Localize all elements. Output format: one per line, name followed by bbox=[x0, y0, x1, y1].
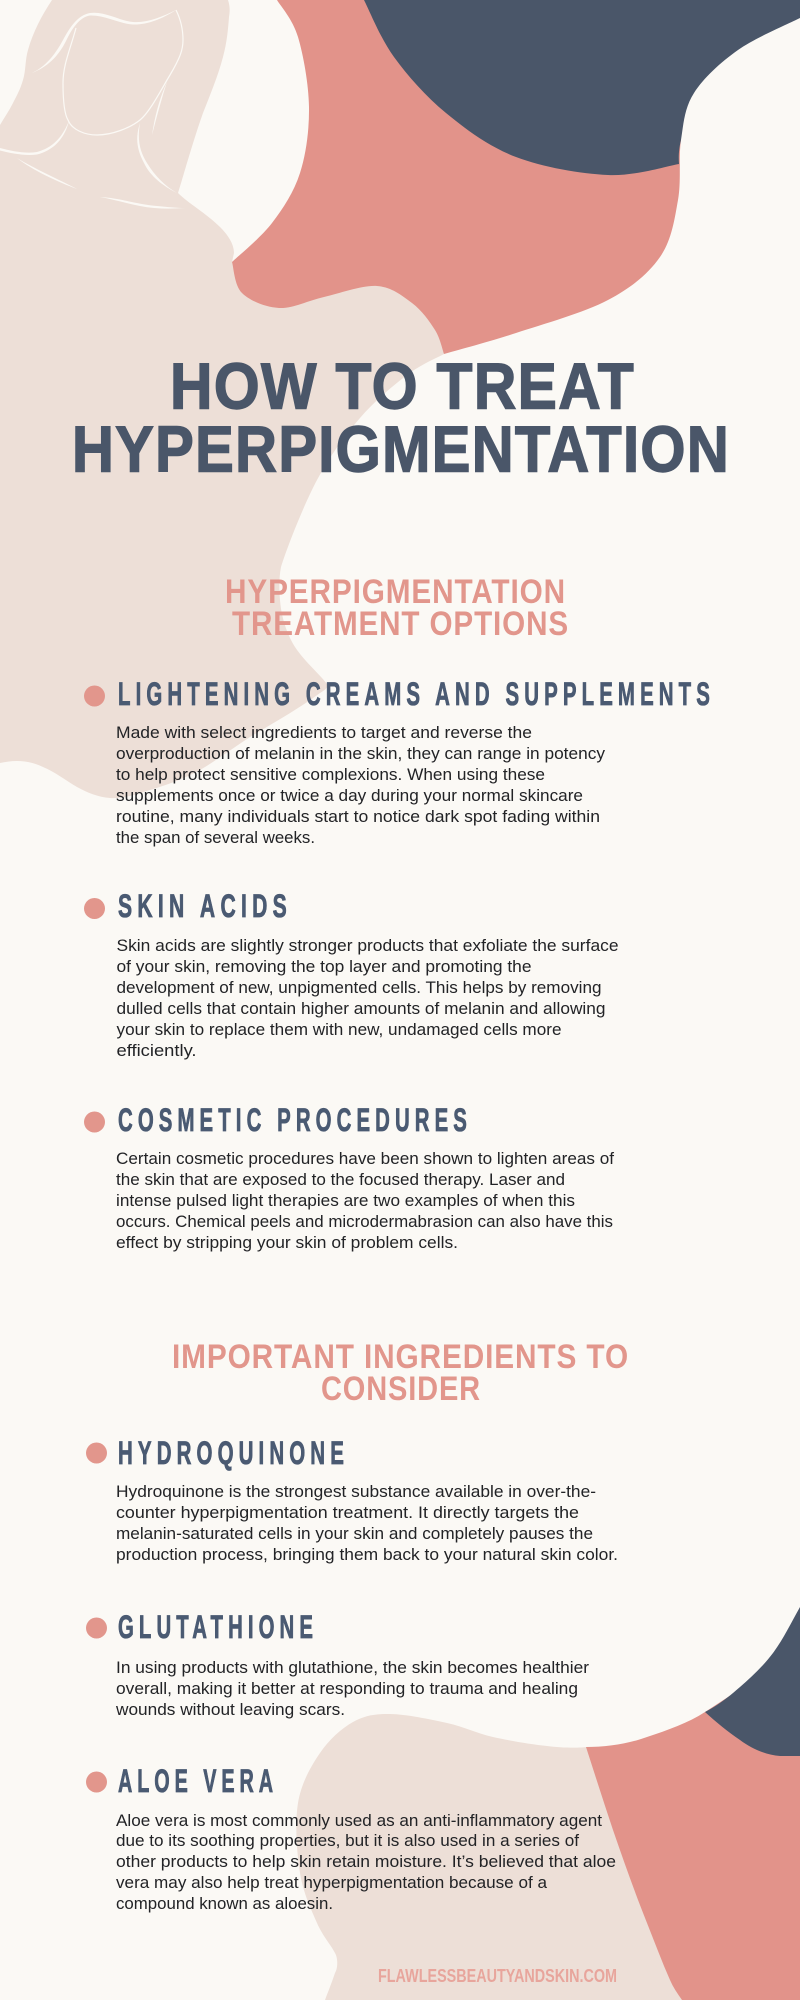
item body: Aloe vera is most commonly used as an anti-inflammatory agent bbox=[116, 1812, 602, 1830]
item body: effect by stripping your skin of problem cells. bbox=[116, 1234, 458, 1252]
dark blob top right bbox=[364, 0, 800, 175]
section heading: important ingredients bbox=[172, 1338, 629, 1408]
bullet bbox=[84, 1112, 105, 1132]
item body: Certain cosmetic procedures have been shown to lighten areas of bbox=[116, 1150, 614, 1168]
item: skin acids bbox=[84, 888, 618, 1060]
bullet bbox=[84, 686, 105, 706]
item body: compound known as aloesin. bbox=[116, 1895, 333, 1913]
neck left and shoulder bbox=[0, 121, 69, 155]
item body: routine, many individuals start to notice dark spot fading within bbox=[116, 808, 600, 826]
item heading: ALOE VERA bbox=[118, 1763, 278, 1799]
bullet bbox=[86, 1442, 107, 1464]
collar right bbox=[100, 197, 185, 209]
item body bbox=[116, 1812, 616, 1913]
beige blob bottom bbox=[296, 1714, 700, 2000]
item body: Skin acids are slightly stronger products that exfoliate the surface bbox=[116, 937, 618, 955]
collar left bbox=[17, 158, 77, 189]
section heading: treatment options: TREATMENT OPTIONS bbox=[232, 605, 569, 643]
item body bbox=[116, 724, 606, 847]
item body: vera may also help treat hyperpigmentation because of a bbox=[116, 1874, 548, 1892]
footer url: FLAWLESSBEAUTYANDSKIN.COM bbox=[378, 1966, 617, 1986]
section heading: important ingredients: IMPORTANT INGREDIENTS TO bbox=[172, 1338, 629, 1376]
bullet bbox=[86, 1772, 107, 1792]
bullet bbox=[84, 898, 105, 919]
item body: occurs. Chemical peels and microdermabrasion can also have this bbox=[116, 1213, 613, 1231]
item heading: HYDROQUINONE bbox=[118, 1435, 349, 1471]
section heading: important ingredients: CONSIDER bbox=[321, 1370, 481, 1408]
item body: production process, bringing them back to your natural skin color. bbox=[116, 1546, 618, 1564]
item body: efficiently. bbox=[116, 1042, 196, 1060]
pink blob top bbox=[232, 0, 681, 354]
item: aloe vera bbox=[86, 1763, 616, 1913]
neck right bbox=[137, 123, 177, 193]
item heading: COSMETIC PROCEDURES bbox=[118, 1102, 472, 1138]
item body: wounds without leaving scars. bbox=[115, 1701, 345, 1719]
top decorative blobs bbox=[0, 0, 800, 798]
side hair strand bbox=[152, 82, 167, 135]
item body: In using products with glutathione, the skin becomes healthier bbox=[116, 1659, 590, 1677]
item body: dulled cells that contain higher amounts of melanin and allowing bbox=[116, 1000, 606, 1018]
item body: intense pulsed light therapies are two examples of when this bbox=[116, 1192, 575, 1210]
item body: Made with select ingredients to target and reverse the bbox=[116, 724, 532, 742]
item: lightening creams bbox=[84, 676, 715, 847]
item body: melanin-saturated cells in your skin and completely pauses the bbox=[116, 1525, 593, 1543]
item body: overall, making it better at responding to trauma and healing bbox=[116, 1680, 578, 1698]
hair line bbox=[32, 10, 176, 73]
item: cosmetic procedures bbox=[84, 1102, 614, 1252]
item body: other products to help skin retain moisture. It’s believed that aloe bbox=[116, 1853, 616, 1871]
item body: of your skin, removing the top layer and promoting the bbox=[116, 958, 532, 976]
section heading: treatment options bbox=[225, 573, 569, 643]
item: hydroquinone bbox=[86, 1435, 618, 1564]
item body: supplements once or twice a day during your normal skincare bbox=[116, 787, 583, 805]
item body bbox=[116, 937, 618, 1060]
item body: your skin to replace them with new, undamaged cells more bbox=[116, 1021, 562, 1039]
item body: counter hyperpigmentation treatment. It directly targets the bbox=[116, 1504, 579, 1522]
dark blob bottom right bbox=[705, 1607, 800, 1756]
item body bbox=[116, 1150, 614, 1252]
item body: due to its soothing properties, but it is also used in a series of bbox=[116, 1832, 579, 1850]
main title bbox=[72, 350, 730, 486]
section heading: treatment options: HYPERPIGMENTATION bbox=[225, 573, 566, 611]
bottom decorative blobs bbox=[296, 1607, 800, 2000]
item: glutathione bbox=[86, 1609, 590, 1719]
item heading: GLUTATHIONE bbox=[118, 1609, 318, 1645]
item body bbox=[115, 1659, 590, 1719]
item body: to help protect sensitive complexions. When using these bbox=[116, 766, 545, 784]
beige blob top left bbox=[0, 0, 444, 798]
pink blob bottom right bbox=[586, 1650, 800, 2000]
item body: development of new, unpigmented cells. This helps by removing bbox=[116, 979, 602, 997]
item body: overproduction of melanin in the skin, they can range in potency bbox=[116, 745, 606, 763]
main title: HYPERPIGMENTATION bbox=[72, 412, 730, 486]
item body: the skin that are exposed to the focused therapy. Laser and bbox=[116, 1171, 565, 1189]
item body: Hydroquinone is the strongest substance available in over-the- bbox=[116, 1483, 596, 1501]
item heading: SKIN ACIDS bbox=[118, 888, 292, 924]
line-art portrait bbox=[0, 10, 185, 209]
main title: HOW TO TREAT bbox=[170, 350, 635, 422]
item body: the span of several weeks. bbox=[116, 829, 315, 847]
bullet bbox=[86, 1618, 107, 1638]
item body bbox=[116, 1483, 618, 1564]
face outline bbox=[63, 10, 183, 135]
